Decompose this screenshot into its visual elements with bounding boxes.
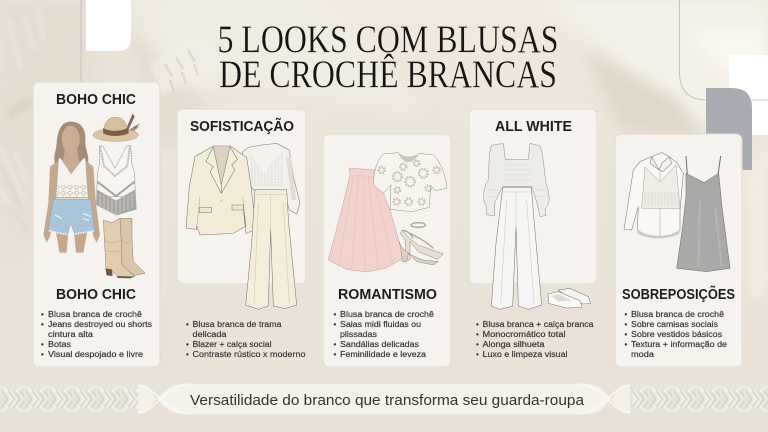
decorative shape: top left white card [81, 0, 131, 82]
list: boho chic: Visual despojado e livre [48, 350, 144, 359]
list: romantismo: Feminilidade e leveza [340, 350, 427, 359]
illustration: woman in crochet top and shorts [43, 122, 100, 253]
illustration: white trousers [491, 187, 542, 309]
title: 5 LOOKS COM BLUSAS [218, 18, 558, 61]
list: romantismo [334, 310, 435, 359]
list: sofisticação: • [186, 320, 189, 329]
background [0, 0, 768, 232]
heading: romantismo: ROMANTISMO [338, 287, 437, 303]
list: sobreposições: Sobre camisas sociais [631, 320, 718, 329]
list: romantismo: • [334, 310, 336, 319]
panel: sobreposições [615, 134, 742, 367]
lace trim [150, 36, 226, 97]
list: all white: • [476, 320, 479, 329]
list: boho chic: • [41, 340, 44, 349]
list: romantismo: Sandálias delicadas [340, 340, 419, 349]
list: all white [476, 320, 594, 359]
list: boho chic: cintura alta [48, 330, 94, 339]
list: boho chic: Botas [48, 340, 71, 349]
heading: sobreposições: SOBREPOSIÇÕES [622, 285, 735, 303]
panel: romantismo [323, 134, 451, 367]
panel: boho chic [33, 82, 160, 367]
list: romantismo: • [334, 320, 336, 329]
list: all white: • [476, 340, 479, 349]
panel: sofisticação [177, 109, 306, 359]
illustration: square neck blouse [484, 143, 549, 217]
heading: boho chic bottom: BOHO CHIC [56, 287, 136, 303]
heading: all white: ALL WHITE [495, 119, 572, 135]
list: sofisticação: • [186, 350, 189, 359]
list: sobreposições: • [624, 310, 628, 319]
list: boho chic: • [41, 310, 44, 319]
illustration: shirt with crochet layer [624, 153, 683, 238]
list: romantismo: plissadas [340, 330, 377, 339]
list: sobreposições: • [624, 320, 628, 329]
icon: hat with feathers [93, 113, 140, 141]
list: sofisticação: delicada [192, 330, 227, 339]
footer banner [0, 384, 768, 414]
illustration: wide-leg trousers [246, 189, 297, 309]
list: sobreposições: • [624, 330, 628, 339]
list: romantismo: Blusa branca de crochê [340, 310, 435, 319]
illustration: cowboy boots [103, 218, 145, 278]
list: sofisticação: • [186, 340, 189, 349]
list: sofisticação: Contraste rústico x moderno [192, 350, 306, 359]
list: boho chic: Jeans destroyed ou shorts [48, 320, 152, 329]
title [218, 18, 558, 96]
heading: boho chic top: BOHO CHIC [56, 92, 136, 108]
list: romantismo: • [334, 340, 336, 349]
list: boho chic: • [41, 320, 44, 329]
list: all white: Monocromático total [482, 330, 566, 339]
list: romantismo: Saias midi fluidas ou [340, 320, 421, 329]
panel: all white [469, 109, 597, 359]
list: sofisticação: Blusa branca de trama [192, 320, 282, 329]
list: sofisticação [186, 320, 306, 359]
list: sobreposições: Blusa branca de crochê [631, 310, 725, 319]
illustration: white slip-on shoes [548, 288, 591, 308]
heading: sofisticação: SOFISTICAÇÃO [190, 117, 294, 135]
list: sobreposições: Sobre vestidos básicos [631, 330, 722, 339]
list: all white: • [476, 330, 479, 339]
illustration: pleated pink skirt [328, 168, 404, 272]
list: boho chic [41, 310, 152, 359]
illustration: strappy sandals [399, 223, 443, 265]
illustration: floral crochet top [373, 153, 447, 212]
illustration: blazer [186, 146, 256, 235]
list: boho chic: Blusa branca de crochê [48, 310, 143, 319]
list: all white: Blusa branca + calça branca [482, 320, 594, 329]
list: all white: Luxo e limpeza visual [482, 350, 568, 359]
list: boho chic: • [41, 350, 44, 359]
list: sobreposições: moda [631, 350, 655, 359]
decorative shape: top right panels [680, 0, 768, 170]
list: all white: • [476, 350, 479, 359]
list: sobreposições [624, 310, 728, 359]
text: tagline: Versatilidade do branco que transforma seu guarda-roupa [190, 392, 585, 409]
illustration: fringe crochet tank top [96, 146, 137, 215]
list: sobreposições: Textura + informação de [631, 340, 728, 349]
title: DE CROCHÊ BRANCAS [219, 52, 557, 96]
illustration: grey slip dress [677, 156, 730, 272]
list: all white: Alonga silhueta [482, 340, 545, 349]
list: sobreposições: • [624, 340, 628, 349]
illustration: lace blouse [242, 143, 300, 214]
list: romantismo: • [334, 350, 336, 359]
list: sofisticação: Blazer + calça social [192, 340, 272, 349]
